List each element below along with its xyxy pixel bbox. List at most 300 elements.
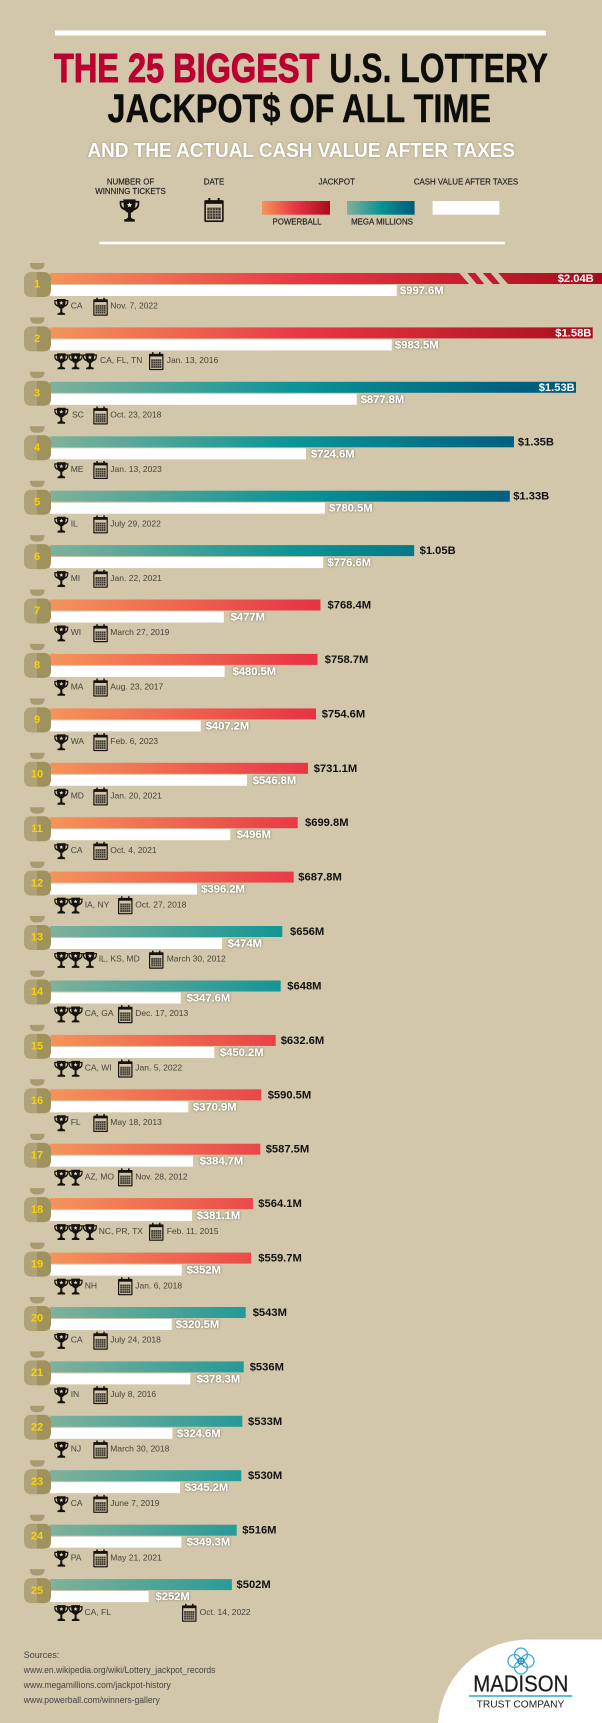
row 18 (24, 1188, 302, 1241)
row 2 (24, 317, 593, 370)
date: Oct. 4, 2021 (110, 845, 157, 855)
states: IN (71, 1389, 79, 1399)
sources (23, 1650, 216, 1705)
legend: cash value label: CASH VALUE AFTER TAXES (414, 178, 518, 186)
jackpot value: $1.53B (539, 382, 575, 394)
jackpot bar (50, 273, 602, 284)
row 11 (24, 807, 349, 860)
rank: 25 (31, 1585, 43, 1597)
rank: 16 (31, 1095, 43, 1107)
cash value: $370.9M (193, 1101, 237, 1113)
cash value: $378.3M (197, 1373, 240, 1385)
legend: powerball label: POWERBALL (272, 218, 322, 226)
cash value: $252M (156, 1591, 190, 1603)
cash value: $407.2M (206, 720, 249, 732)
icon: money bag (24, 698, 51, 732)
icon: calendar (149, 951, 164, 969)
rank: 3 (34, 387, 40, 399)
jackpot value: $502M (236, 1579, 271, 1591)
jackpot value: $559.7M (258, 1253, 302, 1265)
date: March 30, 2018 (110, 1444, 170, 1454)
row 3 (24, 372, 576, 424)
row 4 (24, 426, 554, 479)
jackpot bar (50, 1035, 276, 1046)
states: PA (71, 1552, 82, 1562)
jackpot value: $543M (253, 1307, 287, 1319)
jackpot bar (50, 382, 576, 393)
states: CA (71, 1335, 83, 1345)
jackpot bar (50, 1307, 246, 1318)
cash bar (50, 1482, 180, 1493)
icon: legend calendar (204, 198, 224, 222)
icons: trophies (54, 1006, 83, 1022)
cash value: $349.3M (187, 1537, 230, 1549)
icon: calendar (93, 298, 108, 316)
icons: trophies (54, 952, 97, 968)
states: MI (71, 573, 80, 583)
date: May 18, 2013 (110, 1117, 162, 1127)
icons: trophies (54, 1061, 83, 1077)
icon: calendar (93, 1549, 108, 1567)
icon: calendar (93, 1440, 108, 1458)
source link: wikipedia: www.en.wikipedia.org/wiki/Lottery_jackpot_records (23, 1665, 216, 1675)
subtitle: AND THE ACTUAL CASH VALUE AFTER TAXES (88, 139, 515, 162)
icon: trophy (54, 626, 68, 641)
jackpot value: $632.6M (281, 1035, 324, 1047)
icon: trophy (54, 299, 68, 315)
icon: money bag (24, 263, 51, 297)
states: CA, WI (85, 1063, 112, 1073)
cash value: $724.6M (311, 448, 355, 460)
icon: money bag (24, 1079, 51, 1113)
jackpot value: $590.5M (268, 1089, 311, 1101)
states: CA, FL, TN (100, 355, 142, 365)
cash value: $877.8M (361, 394, 404, 406)
states: IL (71, 518, 78, 528)
icon: money bag (24, 1297, 51, 1331)
icon: calendar (93, 1114, 108, 1132)
jackpot value: $754.6M (322, 708, 365, 720)
icon: trophy (54, 1496, 68, 1512)
bar break marks (459, 273, 508, 284)
icons: trophies (54, 353, 97, 369)
icon: calendar (118, 1277, 132, 1295)
cash bar (50, 1265, 182, 1276)
date: July 8, 2016 (110, 1389, 156, 1399)
icon: trophy (54, 1442, 68, 1458)
rank: 5 (34, 496, 40, 508)
cash bar (50, 1428, 172, 1439)
rank: 6 (34, 551, 40, 563)
rank: 24 (31, 1530, 44, 1542)
icon: money bag (24, 1351, 51, 1385)
icon: money bag (24, 590, 51, 624)
legend: date label: DATE (204, 178, 224, 186)
icon: calendar (93, 570, 108, 588)
cash value: $546.8M (253, 775, 296, 787)
states: IA, NY (85, 899, 110, 909)
lower divider (99, 242, 505, 244)
states: MD (71, 790, 84, 800)
jackpot bar (50, 1253, 251, 1264)
rank: 7 (34, 605, 40, 617)
row 23 (24, 1460, 282, 1513)
date: Oct. 27, 2018 (135, 899, 187, 909)
jackpot value: $516M (242, 1525, 277, 1537)
states: CA (71, 301, 83, 311)
states: CA (71, 845, 83, 855)
icon: money bag (24, 535, 51, 569)
icons: trophies (54, 1279, 83, 1294)
row 12 (24, 862, 342, 914)
cash value: $983.5M (395, 339, 439, 351)
row 10 (24, 753, 357, 806)
rank: 20 (31, 1313, 43, 1325)
rank: 19 (31, 1258, 43, 1270)
icons: trophies (54, 898, 83, 914)
row 17 (24, 1134, 309, 1186)
icon: calendar (93, 624, 108, 642)
legend: mega millions swatch (347, 201, 415, 215)
rank: 15 (31, 1041, 43, 1053)
icon: calendar (93, 461, 108, 479)
cash bar (50, 557, 323, 568)
date: Oct. 14, 2022 (200, 1607, 251, 1617)
row 8 (24, 644, 368, 697)
date: Feb. 6, 2023 (110, 736, 158, 746)
row 19 (24, 1243, 302, 1295)
icon: calendar (182, 1604, 196, 1622)
jackpot value: $758.7M (325, 654, 368, 666)
date: Aug. 23, 2017 (110, 682, 164, 692)
row 6 (24, 535, 456, 588)
rank: 4 (34, 442, 41, 454)
icon: money bag (24, 1460, 51, 1494)
states: CA (71, 1498, 83, 1508)
legend: powerball swatch (262, 201, 330, 215)
date: Feb. 11, 2015 (167, 1226, 219, 1236)
row 21 (24, 1351, 284, 1404)
jackpot bar (50, 491, 510, 502)
jackpot value: $2.04B (558, 273, 594, 285)
cash bar (50, 1591, 149, 1602)
jackpot value: $587.5M (266, 1144, 309, 1156)
jackpot value: $656M (290, 926, 324, 938)
icon: money bag (24, 426, 51, 460)
logo rule (469, 1695, 572, 1697)
cash bar (50, 884, 197, 895)
cash value: $496M (237, 829, 271, 841)
jackpot value: $648M (287, 980, 322, 992)
date: Jan. 6, 2018 (135, 1280, 182, 1290)
title: red headline: THE 25 BIGGEST (54, 45, 320, 91)
jackpot bar (50, 1144, 260, 1155)
rank: 2 (34, 333, 40, 345)
cash value: $347.6M (187, 992, 230, 1004)
date: Oct. 23, 2018 (110, 409, 162, 419)
date: May 21, 2021 (110, 1552, 162, 1562)
icon: money bag (24, 807, 51, 841)
jackpot bar (50, 1579, 232, 1590)
states: NH (85, 1280, 97, 1290)
icon: money bag (24, 644, 51, 678)
cash value: $997.6M (400, 285, 444, 297)
cash value: $384.7M (200, 1156, 243, 1168)
date: March 30, 2012 (167, 954, 226, 964)
icon: money bag (24, 1134, 51, 1168)
icon: money bag (24, 970, 51, 1004)
date: Jan. 13, 2016 (167, 355, 218, 365)
rank: 21 (31, 1367, 43, 1379)
icon: money bag (24, 1243, 51, 1277)
icon: money bag (24, 1406, 51, 1440)
icon: money bag (24, 1025, 51, 1059)
jackpot bar (50, 708, 316, 719)
title: U.S. lottery: U.S. LOTTERY (329, 45, 548, 91)
jackpot bar (50, 817, 298, 828)
icons: trophies (54, 1605, 83, 1621)
row 7 (24, 590, 371, 642)
icon: money bag (24, 1188, 51, 1222)
jackpot bar (50, 1470, 241, 1481)
cash bar (50, 992, 181, 1004)
date: Dec. 17, 2013 (135, 1008, 188, 1018)
date: June 7, 2019 (110, 1498, 160, 1508)
rank: 10 (31, 768, 43, 780)
cash bar (50, 720, 201, 731)
title (54, 45, 548, 131)
jackpot value: $699.8M (305, 817, 349, 829)
row 16 (24, 1079, 311, 1132)
rank: 1 (34, 279, 40, 291)
jackpot value: $1.33B (513, 491, 549, 503)
rank: 22 (31, 1422, 43, 1434)
icon: calendar (118, 1005, 132, 1023)
jackpot bar (50, 600, 320, 610)
rank: 8 (34, 660, 40, 672)
legend: jackpot label: JACKPOT (319, 178, 355, 186)
row 24 (24, 1515, 277, 1567)
states: WA (71, 736, 84, 746)
cash bar (50, 1319, 172, 1330)
date: Jan. 5, 2022 (135, 1063, 182, 1073)
row 14 (24, 970, 322, 1023)
cash value: $450.2M (220, 1047, 264, 1059)
date: Nov. 28, 2012 (135, 1171, 188, 1181)
cash bar (50, 1101, 188, 1112)
icon: money bag (24, 317, 51, 351)
icon: trophy (54, 462, 68, 478)
rank: 17 (31, 1149, 43, 1161)
icon: money bag (24, 916, 51, 950)
cash value: $477M (231, 612, 265, 624)
icons: trophies (54, 1170, 83, 1186)
icon: trophy (54, 680, 68, 696)
row 1 (24, 263, 602, 316)
cash value: $381.1M (197, 1210, 240, 1222)
date: Jan. 22, 2021 (110, 573, 162, 583)
date: July 24, 2018 (110, 1335, 161, 1345)
cash bar (50, 666, 225, 677)
rank: 14 (31, 986, 44, 998)
states: FL (71, 1117, 81, 1127)
rank: 9 (34, 714, 40, 726)
cash bar (50, 1156, 193, 1167)
row 13 (24, 916, 324, 969)
jackpot value: $564.1M (258, 1198, 302, 1210)
rank: 12 (31, 877, 43, 889)
jackpot bar (50, 436, 514, 447)
icon: money bag (24, 753, 51, 787)
source link: powerball: www.powerball.com/winners-gallery (23, 1695, 160, 1705)
icon: trophy (54, 1333, 68, 1349)
cash bar (50, 829, 230, 840)
cash bar (50, 503, 325, 514)
cash bar (50, 285, 397, 296)
cash value: $396.2M (201, 884, 245, 896)
legend: mega millions label: MEGA MILLIONS (351, 218, 413, 226)
icon: money bag (24, 862, 51, 896)
cash value: $352M (187, 1265, 221, 1277)
logo panel (438, 1640, 602, 1723)
cash bar (50, 612, 224, 622)
states: NJ (71, 1444, 81, 1454)
icon: trophy (54, 1551, 68, 1567)
logo tagline: TRUST COMPANY (477, 1699, 565, 1710)
row 25 (24, 1569, 271, 1622)
icon: calendar (118, 1168, 132, 1186)
icon: trophy (54, 843, 68, 859)
cash bar (50, 394, 357, 405)
rank: 23 (31, 1476, 43, 1488)
date: Jan. 20, 2021 (110, 790, 162, 800)
sources heading: Sources: (24, 1650, 59, 1660)
cash bar (50, 775, 247, 786)
jackpot value: $533M (248, 1416, 282, 1428)
icon: calendar (118, 1060, 132, 1078)
icon: calendar (93, 1495, 108, 1513)
cash value: $480.5M (233, 666, 276, 678)
icons: trophies (54, 1224, 97, 1240)
cash value: $324.6M (177, 1428, 221, 1440)
icon: calendar (93, 1332, 108, 1350)
cash bar (50, 1373, 190, 1384)
icon: trophy (54, 1115, 68, 1131)
jackpot value: $731.1M (314, 763, 357, 775)
jackpot value: $768.4M (328, 600, 371, 612)
jackpot bar (50, 327, 593, 338)
icon: calendar (93, 1386, 108, 1404)
jackpot value: $1.58B (555, 327, 591, 339)
cash bar (50, 1047, 214, 1058)
states: SC (72, 409, 84, 419)
top divider (55, 30, 546, 36)
jackpot bar (50, 763, 308, 774)
row 20 (24, 1297, 287, 1350)
jackpot bar (50, 872, 294, 883)
icon: calendar (149, 352, 164, 370)
icon: money bag (24, 1515, 51, 1549)
states: AZ, MO (85, 1171, 114, 1181)
jackpot value: $1.05B (420, 545, 456, 557)
icon: trophy (54, 1387, 68, 1403)
icon: money bag (24, 481, 51, 515)
jackpot bar (50, 926, 282, 937)
cash value: $320.5M (176, 1319, 219, 1331)
cash bar (50, 448, 306, 459)
cash bar (50, 938, 222, 949)
cash value: $780.5M (329, 503, 373, 515)
legend: winning tickets label: NUMBER OF (107, 178, 154, 186)
cash value: $474M (228, 938, 262, 950)
jackpot bar (50, 1198, 253, 1209)
icon: trophy (54, 408, 68, 424)
icon: calendar (93, 679, 108, 697)
rank: 18 (31, 1204, 43, 1216)
icon: calendar (93, 788, 108, 806)
icon: calendar (149, 1223, 164, 1241)
date: March 27, 2019 (110, 627, 170, 637)
icon: legend trophy (120, 199, 139, 222)
date: July 29, 2022 (110, 518, 161, 528)
row 9 (24, 698, 365, 751)
jackpot value: $536M (250, 1361, 284, 1373)
cash value: $345.2M (185, 1482, 228, 1494)
cash bar (50, 1537, 181, 1548)
icon: trophy (54, 571, 68, 587)
jackpot value: $530M (248, 1470, 282, 1482)
rank: 13 (31, 932, 43, 944)
source link: mega millions: www.megamillions.com/jackpot-history (23, 1680, 171, 1690)
icon: calendar (93, 842, 108, 860)
states: IL, KS, MD (99, 954, 140, 964)
icon: money bag (24, 1569, 51, 1603)
states: CA, GA (85, 1008, 114, 1018)
icon: trophy (54, 517, 68, 533)
jackpot bar (50, 980, 281, 992)
row 15 (24, 1025, 324, 1078)
icon: calendar (93, 515, 108, 533)
icon: trophy (54, 734, 68, 750)
rank: 11 (31, 823, 43, 835)
jackpot bar (50, 1525, 237, 1536)
icon: calendar (93, 406, 108, 424)
date: Jan. 13, 2023 (110, 464, 162, 474)
states: NC, PR, TX (99, 1226, 143, 1236)
cash bar (50, 339, 392, 350)
icon: calendar (93, 733, 108, 751)
icon: trophy (54, 789, 68, 805)
legend (95, 178, 518, 226)
states: WI (71, 627, 81, 637)
icon: calendar (118, 896, 132, 914)
jackpot bar (50, 654, 318, 665)
icon: rosette (508, 1648, 534, 1674)
cash value: $776.6M (328, 557, 371, 569)
jackpot bar (50, 1416, 242, 1427)
white corner shape (438, 1640, 602, 1723)
jackpot bar (50, 1361, 244, 1372)
states: MA (71, 682, 84, 692)
jackpot bar (50, 1089, 261, 1100)
legend: winning tickets label: WINNING TICKETS (95, 187, 166, 196)
legend: cash value swatch (433, 201, 499, 215)
logo wordmark: MADISON (473, 1671, 568, 1697)
states: ME (71, 464, 84, 474)
date: Nov. 7, 2022 (110, 301, 158, 311)
icon: money bag (24, 372, 51, 406)
jackpot value: $1.35B (518, 436, 554, 448)
